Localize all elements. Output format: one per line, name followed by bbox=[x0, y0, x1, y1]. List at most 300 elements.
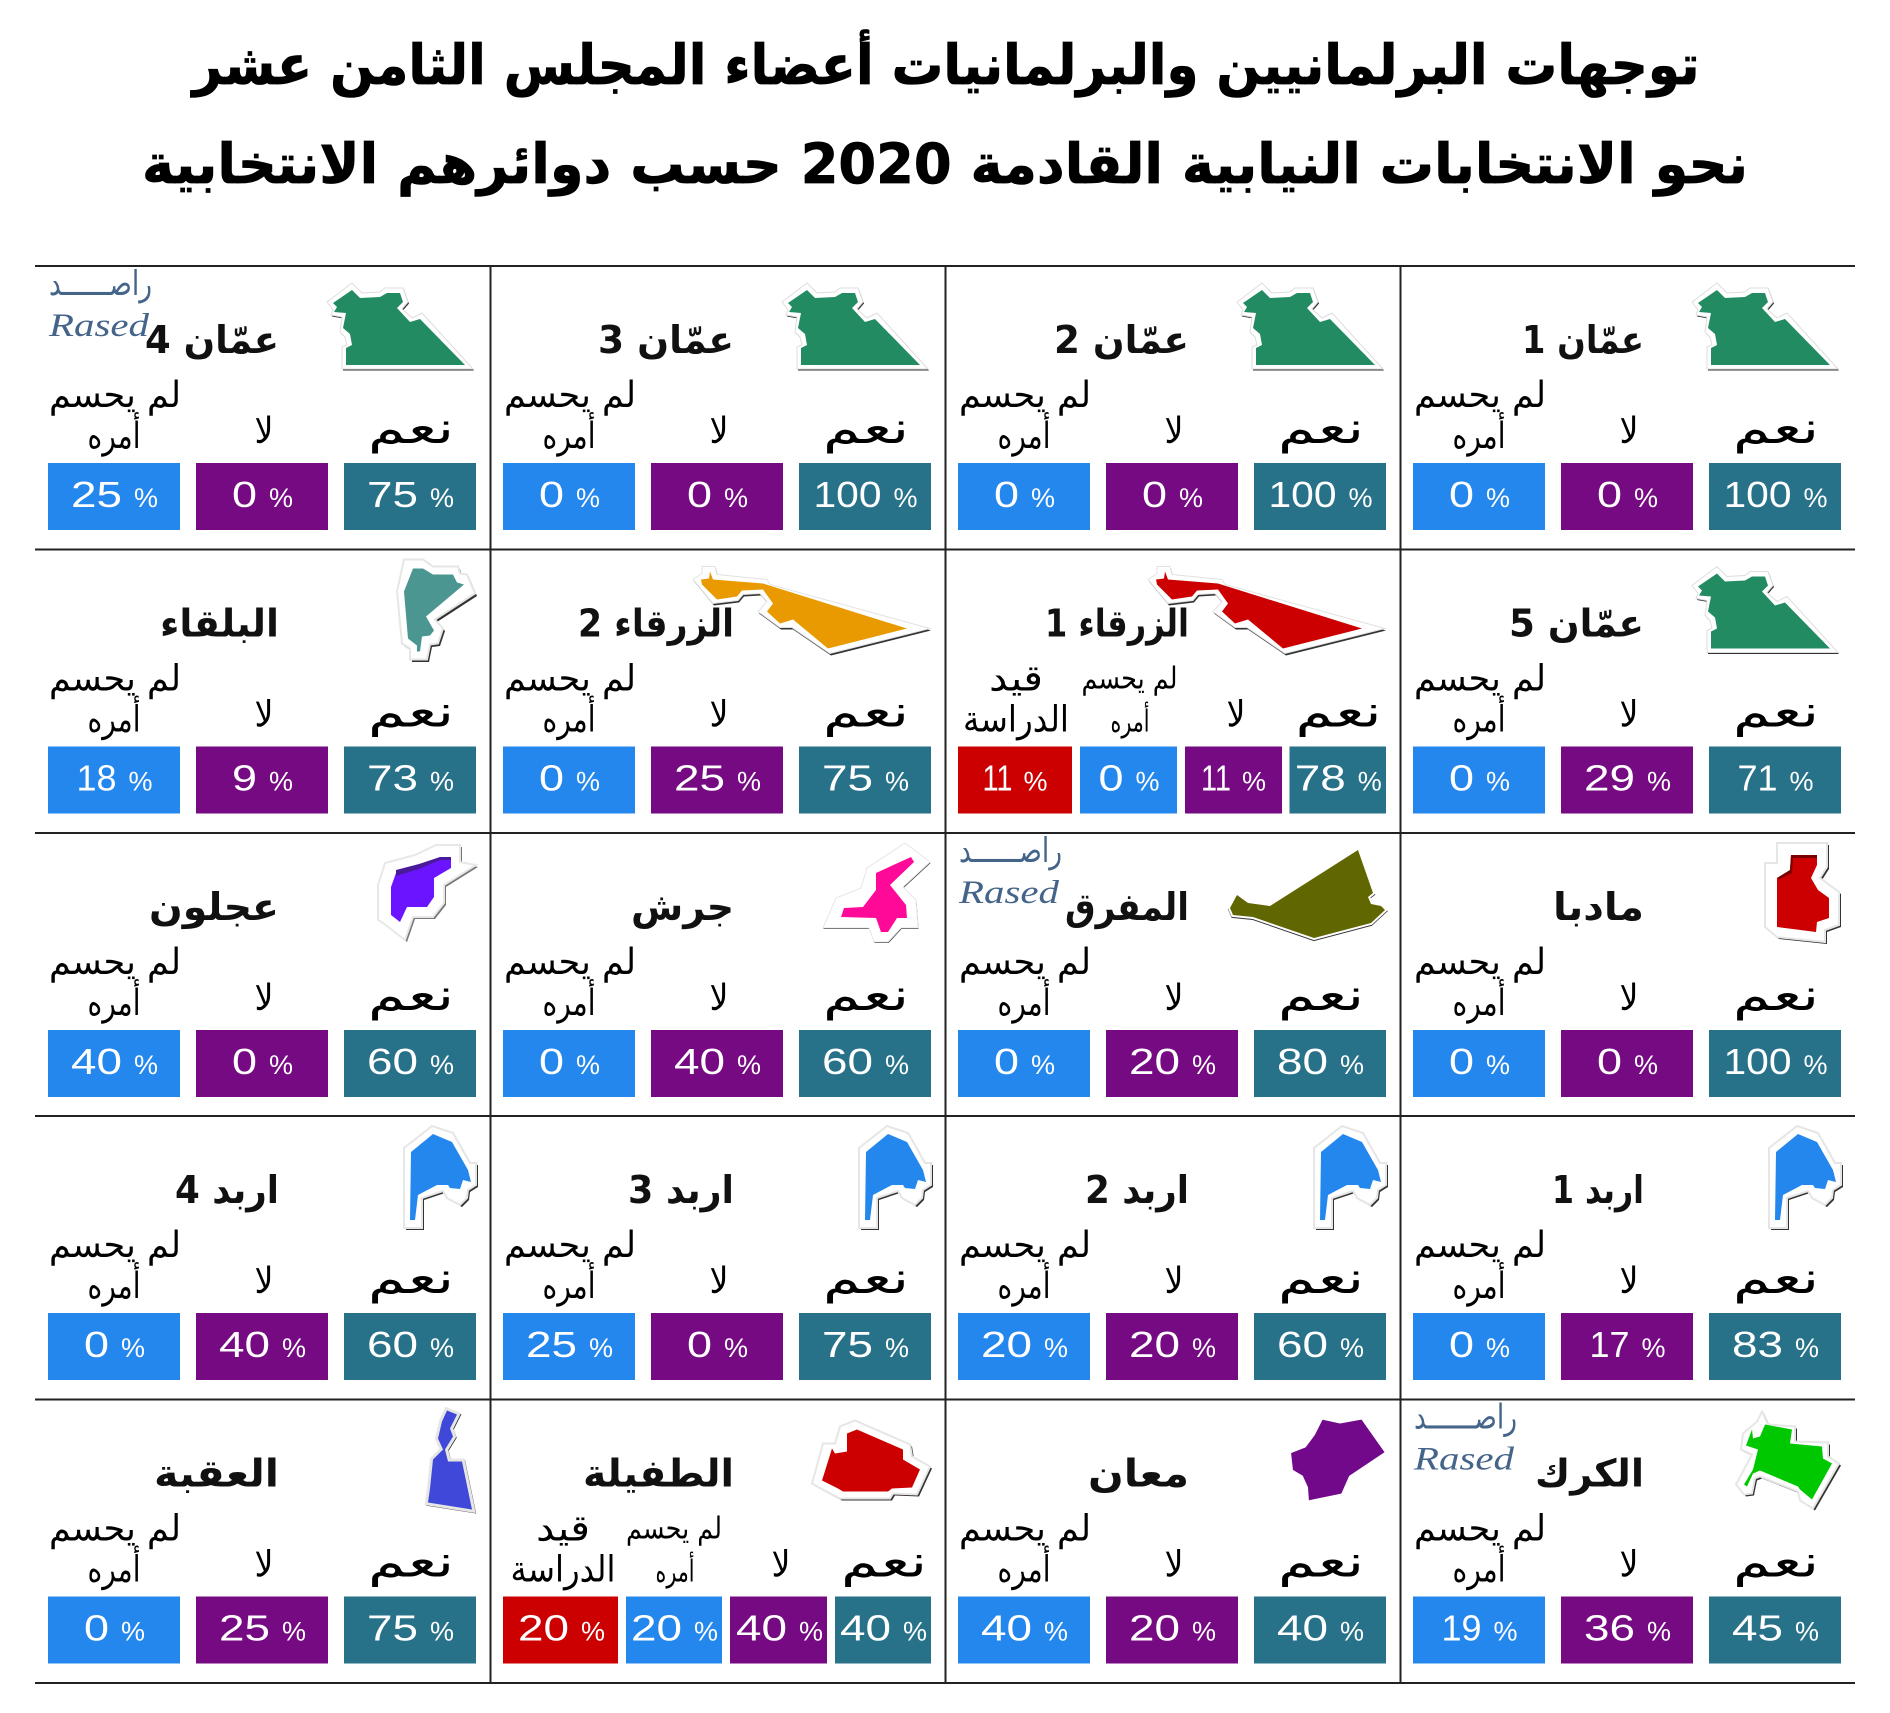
panel: Mafraq bbox=[958, 831, 1386, 1097]
value: yes 100 bbox=[799, 463, 931, 530]
value: yes 78: 78 bbox=[1295, 758, 1346, 798]
icon: Irbid map bbox=[404, 1126, 478, 1230]
option labels: لا bbox=[772, 1544, 790, 1586]
value: undecided 0: % bbox=[1486, 766, 1510, 796]
option labels: لا bbox=[254, 411, 274, 452]
value: no 0 bbox=[196, 463, 328, 530]
option labels bbox=[49, 1225, 454, 1307]
heading: الزرقاء 1 bbox=[1045, 602, 1189, 646]
option labels bbox=[1414, 942, 1819, 1024]
value: no 11: % bbox=[1242, 766, 1266, 796]
value: yes 45: % bbox=[1795, 1616, 1819, 1646]
option labels: لا bbox=[1164, 1261, 1184, 1302]
option labels bbox=[510, 1508, 927, 1590]
value: no 20: 20 bbox=[1129, 1608, 1180, 1648]
option labels: نعم bbox=[1278, 1253, 1364, 1304]
value: under study 20: % bbox=[581, 1616, 605, 1646]
option labels: نعم bbox=[1733, 403, 1819, 454]
value: no 17: 17 bbox=[1590, 1324, 1630, 1365]
value: undecided 0 bbox=[1413, 463, 1545, 530]
option labels: أمره bbox=[998, 1262, 1050, 1307]
option labels: لا bbox=[1620, 978, 1638, 1019]
value: no 0: % bbox=[1634, 483, 1658, 513]
value: no 20 bbox=[1106, 1030, 1238, 1097]
value: yes 100: 100 bbox=[1724, 1041, 1792, 1082]
icon: Amman map bbox=[1692, 283, 1839, 370]
value: undecided 0: 0 bbox=[539, 758, 564, 798]
value: no 40 bbox=[196, 1313, 328, 1380]
logo: Rased bbox=[958, 831, 1062, 911]
option labels: أمره bbox=[88, 1546, 140, 1590]
value: undecided 25: 25 bbox=[71, 474, 122, 515]
logo: Rased: راصــــــد bbox=[959, 831, 1062, 871]
value: no 0: % bbox=[269, 1050, 293, 1080]
value: undecided 0: 0 bbox=[84, 1608, 109, 1648]
option labels: نعم bbox=[1733, 970, 1819, 1021]
panel: Jerash bbox=[503, 843, 931, 1097]
option labels: أمره bbox=[998, 412, 1050, 457]
value: yes 75: 75 bbox=[367, 1608, 418, 1648]
value: yes 60: % bbox=[430, 1333, 454, 1363]
icon: Zarqa map bbox=[1148, 566, 1386, 656]
value: no 0: 0 bbox=[1142, 474, 1167, 515]
heading: المفرق bbox=[1065, 885, 1189, 929]
value: undecided 19: 19 bbox=[1442, 1608, 1482, 1648]
heading: الطفيلة bbox=[583, 1452, 734, 1496]
value: yes 75 bbox=[344, 1596, 476, 1664]
value: under study 11: 11 bbox=[982, 758, 1012, 798]
value: undecided 40: % bbox=[134, 1050, 158, 1080]
heading: عمّان 5 bbox=[1509, 602, 1644, 646]
panel: Amman 4 bbox=[48, 264, 476, 530]
value: no 0 bbox=[1561, 463, 1693, 530]
heading: عمّان 1 bbox=[1522, 318, 1644, 362]
value: undecided 20: % bbox=[694, 1616, 718, 1646]
value: undecided 0 bbox=[48, 1596, 180, 1664]
icon: Amman map bbox=[782, 283, 929, 370]
option labels bbox=[49, 942, 454, 1024]
value: no 20 bbox=[1106, 1313, 1238, 1380]
value: no 20: % bbox=[1192, 1050, 1216, 1080]
icon: Zarqa map bbox=[693, 566, 931, 656]
value: no 0 bbox=[651, 463, 783, 530]
value: yes 60: 60 bbox=[822, 1041, 873, 1082]
option labels bbox=[1414, 1225, 1819, 1307]
option labels: نعم bbox=[1733, 1253, 1819, 1304]
panel: Irbid 3 bbox=[503, 1126, 933, 1380]
value: yes 40: % bbox=[903, 1616, 927, 1646]
icon: Irbid map bbox=[859, 1126, 933, 1230]
value: undecided 19 bbox=[1413, 1596, 1545, 1664]
value: no 25: % bbox=[282, 1616, 306, 1646]
option labels: أمره bbox=[1452, 412, 1506, 457]
value: yes 73: 73 bbox=[367, 758, 418, 798]
value: undecided 0: 0 bbox=[1449, 758, 1474, 798]
value: no 0: 0 bbox=[1597, 1041, 1622, 1082]
option labels: نعم bbox=[368, 686, 454, 738]
value: yes 60: 60 bbox=[367, 1041, 418, 1082]
panel: Amman 2 bbox=[958, 283, 1386, 530]
value: yes 75 bbox=[799, 1313, 931, 1380]
panel: Ajloun bbox=[48, 845, 478, 1097]
option labels: لم يحسم bbox=[49, 1508, 181, 1550]
value: undecided 25: % bbox=[134, 483, 158, 513]
icon: Madaba map bbox=[1765, 843, 1841, 944]
icon: Amman map bbox=[1237, 283, 1384, 370]
value: undecided 0: 0 bbox=[1449, 1324, 1474, 1365]
value: no 40: 40 bbox=[219, 1324, 270, 1365]
heading: جرش bbox=[631, 885, 734, 929]
value: undecided 0: % bbox=[1031, 483, 1055, 513]
option labels: أمره bbox=[88, 979, 140, 1024]
panel: Irbid 2 bbox=[958, 1126, 1388, 1380]
value: under study 11: % bbox=[1024, 766, 1048, 796]
value: yes 80: 80 bbox=[1277, 1041, 1328, 1082]
option labels: لم يحسم bbox=[1414, 1508, 1546, 1550]
value: undecided 0: 0 bbox=[994, 474, 1019, 515]
value: under study 20 bbox=[503, 1596, 618, 1664]
value: no 20: 20 bbox=[1129, 1324, 1180, 1365]
logo: Rased: Rased bbox=[48, 308, 150, 344]
option labels: لم يحسم bbox=[504, 942, 636, 983]
option labels bbox=[959, 375, 1364, 457]
option labels: لا bbox=[1164, 1544, 1184, 1586]
heading: البلقاء bbox=[160, 602, 279, 646]
option labels: نعم bbox=[368, 970, 454, 1021]
value: no 29 bbox=[1561, 746, 1693, 814]
heading: اربد 3 bbox=[628, 1168, 734, 1212]
value: no 0: % bbox=[1634, 1050, 1658, 1080]
value: yes 75: % bbox=[885, 766, 909, 796]
option labels: نعم bbox=[1278, 403, 1364, 454]
panel: Aqaba bbox=[48, 1410, 476, 1664]
value: no 20 bbox=[1106, 1596, 1238, 1664]
value: undecided 0: 0 bbox=[1449, 474, 1474, 515]
value: no 9: 9 bbox=[232, 758, 257, 798]
value: yes 75: % bbox=[885, 1333, 909, 1363]
icon: Karak map bbox=[1736, 1412, 1841, 1510]
value: no 29: 29 bbox=[1584, 758, 1635, 798]
value: yes 60 bbox=[1254, 1313, 1386, 1380]
heading: اربد 2 bbox=[1085, 1168, 1189, 1212]
option labels: الدراسة bbox=[963, 700, 1069, 740]
value: undecided 20: 20 bbox=[631, 1608, 682, 1648]
icon: Ajloun map bbox=[378, 845, 478, 942]
panel: Karak bbox=[1413, 1398, 1841, 1664]
title line 1: توجهات البرلمانيين والبرلمانيات أعضاء المجلس الثامن عشر bbox=[190, 29, 1699, 98]
panel: Amman 3 bbox=[503, 283, 931, 530]
value: yes 75: % bbox=[430, 483, 454, 513]
value: yes 45: 45 bbox=[1732, 1608, 1783, 1648]
value: undecided 40 bbox=[958, 1596, 1090, 1664]
value: undecided 40: % bbox=[1044, 1616, 1068, 1646]
option labels: أمره bbox=[656, 1550, 694, 1590]
value: no 0: % bbox=[269, 483, 293, 513]
value: no 0 bbox=[196, 1030, 328, 1097]
option labels: نعم bbox=[368, 1536, 454, 1588]
value: yes 100: % bbox=[894, 483, 918, 513]
option labels: لا bbox=[1620, 1261, 1638, 1302]
value: no 36: 36 bbox=[1584, 1608, 1635, 1648]
value: no 11: 11 bbox=[1201, 758, 1231, 798]
option labels: لا bbox=[1620, 1544, 1638, 1586]
heading: عجلون bbox=[149, 885, 279, 929]
heading: مادبا bbox=[1553, 885, 1644, 929]
option labels: لا bbox=[254, 694, 274, 736]
value: undecided 0 bbox=[503, 746, 635, 814]
value: undecided 0 bbox=[958, 463, 1090, 530]
option labels: نعم bbox=[823, 1253, 909, 1304]
value: yes 78: % bbox=[1358, 766, 1382, 796]
value: undecided 0 bbox=[503, 463, 635, 530]
value: undecided 0: % bbox=[1031, 1050, 1055, 1080]
value: yes 60: 60 bbox=[367, 1324, 418, 1365]
value: undecided 40 bbox=[48, 1030, 180, 1097]
value: undecided 0: % bbox=[576, 483, 600, 513]
value: yes 40 bbox=[835, 1596, 931, 1664]
option labels: نعم bbox=[823, 970, 909, 1021]
value: no 0: % bbox=[1179, 483, 1203, 513]
value: yes 71 bbox=[1709, 746, 1841, 814]
icon: Irbid map bbox=[1769, 1126, 1843, 1230]
option labels: لم يحسم bbox=[959, 375, 1091, 416]
option labels: نعم bbox=[1733, 686, 1819, 738]
value: no 40: % bbox=[799, 1616, 823, 1646]
value: undecided 0 bbox=[958, 1030, 1090, 1097]
panel: Maan bbox=[958, 1418, 1386, 1664]
value: no 0: 0 bbox=[687, 474, 712, 515]
heading: العقبة bbox=[154, 1452, 279, 1496]
icon: Aqaba map bbox=[428, 1410, 473, 1510]
value: no 36: % bbox=[1647, 1616, 1671, 1646]
value: yes 60 bbox=[799, 1030, 931, 1097]
value: undecided 0: % bbox=[121, 1616, 145, 1646]
value: no 0 bbox=[1106, 463, 1238, 530]
logo: Rased bbox=[48, 264, 152, 344]
icon: Amman map bbox=[1692, 566, 1839, 654]
value: no 20: % bbox=[1192, 1616, 1216, 1646]
value: yes 40: % bbox=[1340, 1616, 1364, 1646]
value: no 40 bbox=[651, 1030, 783, 1097]
value: no 25: 25 bbox=[674, 758, 725, 798]
value: no 9 bbox=[196, 746, 328, 814]
option labels: لم يحسم bbox=[504, 1225, 636, 1266]
option labels bbox=[959, 1508, 1364, 1590]
icon: Balqa map bbox=[397, 560, 477, 662]
value: undecided 20: 20 bbox=[981, 1324, 1032, 1365]
value: undecided 0: % bbox=[1486, 1050, 1510, 1080]
value: undecided 19: % bbox=[1494, 1616, 1518, 1646]
option labels bbox=[504, 1225, 909, 1307]
option labels: أمره bbox=[88, 1262, 140, 1307]
option labels: لم يحسم bbox=[959, 942, 1091, 983]
value: yes 75: % bbox=[430, 1616, 454, 1646]
value: yes 78 bbox=[1290, 746, 1386, 814]
option labels: لا bbox=[254, 1261, 274, 1302]
logo: Rased: Rased bbox=[958, 875, 1060, 911]
value: yes 83: 83 bbox=[1732, 1324, 1783, 1365]
value: undecided 18 bbox=[48, 746, 180, 814]
value: yes 60: % bbox=[1340, 1333, 1364, 1363]
value: no 0: % bbox=[724, 1333, 748, 1363]
option labels: نعم bbox=[1296, 686, 1382, 738]
option labels: لم يحسم bbox=[49, 942, 181, 983]
option labels: أمره bbox=[542, 979, 596, 1024]
panel: Amman 5 bbox=[1413, 566, 1841, 814]
value: undecided 0: % bbox=[121, 1333, 145, 1363]
value: no 0: 0 bbox=[687, 1324, 712, 1365]
value: undecided 0: % bbox=[576, 1050, 600, 1080]
value: yes 75 bbox=[344, 463, 476, 530]
option labels: قيد bbox=[536, 1508, 590, 1550]
value: undecided 20 bbox=[626, 1596, 722, 1664]
value: yes 100 bbox=[1254, 463, 1386, 530]
option labels: لم يحسم bbox=[626, 1512, 722, 1546]
option labels bbox=[963, 658, 1382, 740]
value: no 9: % bbox=[269, 766, 293, 796]
value: undecided 0: 0 bbox=[539, 1041, 564, 1082]
value: yes 80: % bbox=[1340, 1050, 1364, 1080]
value: undecided 0 bbox=[1413, 746, 1545, 814]
panel: Irbid 1 bbox=[1413, 1126, 1843, 1380]
option labels: أمره bbox=[88, 412, 140, 457]
value: no 0: 0 bbox=[232, 474, 257, 515]
option labels: لم يحسم bbox=[1414, 658, 1546, 700]
option labels: أمره bbox=[1452, 1262, 1506, 1307]
option labels: نعم bbox=[368, 1253, 454, 1304]
option labels: لا bbox=[254, 978, 274, 1019]
option labels: الدراسة bbox=[510, 1550, 616, 1590]
icon: Amman map bbox=[327, 283, 474, 370]
option labels: نعم bbox=[823, 403, 909, 454]
title line 2: نحو الانتخابات النيابية القادمة 2020 حسب دوائرهم الانتخابية bbox=[142, 132, 1748, 197]
option labels bbox=[1414, 375, 1819, 457]
option labels: أمره bbox=[542, 1262, 596, 1307]
value: yes 73: % bbox=[430, 766, 454, 796]
option labels bbox=[49, 658, 454, 740]
option labels: أمره bbox=[1452, 1546, 1506, 1590]
value: no 40: 40 bbox=[736, 1608, 787, 1648]
option labels: لا bbox=[1164, 978, 1184, 1019]
heading: اربد 4 bbox=[175, 1168, 279, 1212]
option labels: لم يحسم bbox=[1414, 1225, 1546, 1266]
logo: Rased: راصــــــد bbox=[1414, 1398, 1517, 1438]
value: undecided 0: 0 bbox=[539, 474, 564, 515]
value: no 20: 20 bbox=[1129, 1041, 1180, 1082]
option labels: نعم bbox=[841, 1536, 927, 1588]
value: undecided 0: 0 bbox=[1449, 1041, 1474, 1082]
value: yes 100 bbox=[1709, 1030, 1841, 1097]
value: yes 100: 100 bbox=[1724, 474, 1792, 515]
panel: Madaba bbox=[1413, 843, 1841, 1097]
option labels bbox=[504, 375, 909, 457]
heading: عمّان 3 bbox=[598, 318, 734, 362]
value: undecided 0: 0 bbox=[994, 1041, 1019, 1082]
heading: معان bbox=[1088, 1452, 1189, 1496]
option labels: لا bbox=[1620, 694, 1638, 736]
value: no 25: % bbox=[737, 766, 761, 796]
value: yes 71: % bbox=[1790, 766, 1814, 796]
icon: Jerash map bbox=[823, 843, 930, 943]
option labels: أمره bbox=[1452, 979, 1506, 1024]
panel: Zarqa 1 bbox=[958, 566, 1386, 814]
option labels: لم يحسم bbox=[1414, 375, 1546, 416]
option labels: نعم bbox=[823, 686, 909, 738]
option labels bbox=[1414, 658, 1819, 740]
option labels: لم يحسم bbox=[504, 658, 636, 700]
option labels bbox=[49, 375, 454, 457]
panel: Zarqa 2 bbox=[503, 566, 931, 814]
icon: Mafraq map bbox=[1230, 850, 1385, 939]
heading: اربد 1 bbox=[1552, 1168, 1644, 1212]
option labels: لم يحسم bbox=[1414, 942, 1546, 983]
value: undecided 0: % bbox=[576, 766, 600, 796]
value: no 40: 40 bbox=[674, 1041, 725, 1082]
value: undecided 0 bbox=[1413, 1030, 1545, 1097]
value: no 17: % bbox=[1642, 1333, 1666, 1363]
option labels: لم يحسم bbox=[49, 375, 181, 416]
value: undecided 0: 0 bbox=[1098, 758, 1124, 798]
option labels: لا bbox=[710, 411, 728, 452]
option labels: لا bbox=[1164, 411, 1184, 452]
value: yes 73 bbox=[344, 746, 476, 814]
option labels: لم يحسم bbox=[49, 1225, 181, 1266]
value: undecided 25: % bbox=[589, 1333, 613, 1363]
value: no 29: % bbox=[1647, 766, 1671, 796]
option labels: أمره bbox=[1452, 696, 1506, 740]
value: under study 11 bbox=[958, 746, 1072, 814]
value: yes 100: 100 bbox=[814, 474, 882, 515]
value: no 0: % bbox=[724, 483, 748, 513]
icon: Tafila map bbox=[812, 1420, 932, 1500]
value: undecided 0: % bbox=[1486, 483, 1510, 513]
option labels bbox=[959, 1225, 1364, 1307]
icon: Maan map bbox=[1290, 1418, 1386, 1502]
value: undecided 18: 18 bbox=[76, 758, 116, 798]
title bbox=[142, 29, 1748, 197]
value: no 20: % bbox=[1192, 1333, 1216, 1363]
value: no 40 bbox=[730, 1596, 827, 1664]
option labels bbox=[504, 942, 909, 1024]
value: yes 75: 75 bbox=[367, 474, 418, 515]
value: yes 71: 71 bbox=[1738, 758, 1778, 798]
option labels: نعم bbox=[368, 403, 454, 454]
value: yes 100: % bbox=[1804, 1050, 1828, 1080]
icon: Irbid map bbox=[1314, 1126, 1388, 1230]
value: yes 83 bbox=[1709, 1313, 1841, 1380]
value: no 25: 25 bbox=[219, 1608, 270, 1648]
heading: عمّان 4 bbox=[145, 318, 279, 362]
value: yes 60: % bbox=[430, 1050, 454, 1080]
value: no 25 bbox=[196, 1596, 328, 1664]
logo: Rased: راصــــــد bbox=[49, 264, 152, 304]
value: yes 75 bbox=[799, 746, 931, 814]
value: undecided 0: 0 bbox=[84, 1324, 109, 1365]
value: no 36 bbox=[1561, 1596, 1693, 1664]
value: yes 100: % bbox=[1804, 483, 1828, 513]
option labels bbox=[1414, 1508, 1819, 1590]
option labels: أمره bbox=[88, 696, 140, 740]
value: undecided 20: % bbox=[1044, 1333, 1068, 1363]
value: yes 60 bbox=[344, 1313, 476, 1380]
value: no 0: 0 bbox=[232, 1041, 257, 1082]
option labels: لم يحسم bbox=[504, 375, 636, 416]
value: yes 60: % bbox=[885, 1050, 909, 1080]
heading: الكرك bbox=[1535, 1452, 1644, 1496]
logo: Rased: Rased bbox=[1413, 1442, 1515, 1478]
heading: الزرقاء 2 bbox=[578, 602, 734, 646]
option labels: لم يحسم bbox=[959, 1225, 1091, 1266]
